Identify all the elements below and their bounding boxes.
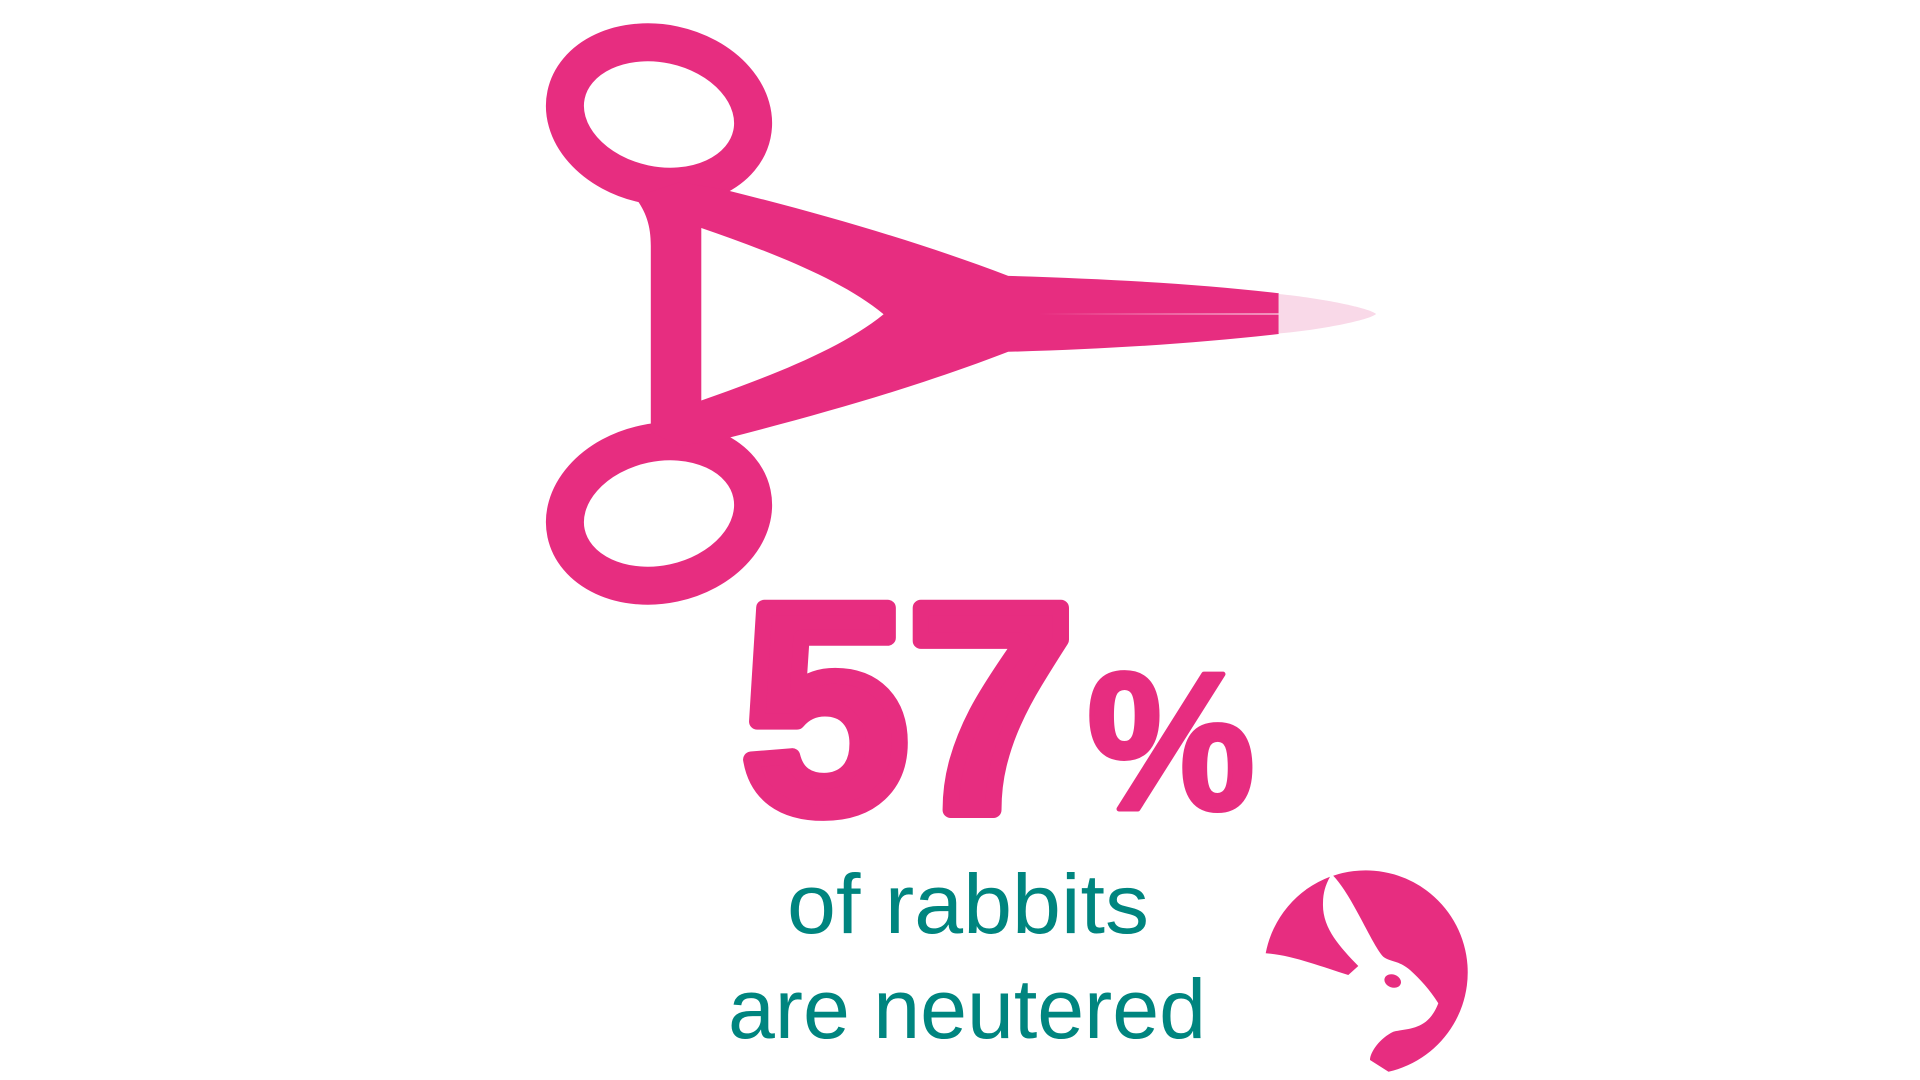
scissors bottom finger ring xyxy=(551,424,767,603)
icon: rabbit in circle xyxy=(1266,870,1468,1072)
rabbit head background segment xyxy=(1333,870,1468,1072)
statistic: 57: 57 xyxy=(742,545,1074,873)
scissors body and blades xyxy=(635,182,1279,446)
caption line: are neutered: are neutered xyxy=(728,962,1206,1056)
caption line: of rabbits: of rabbits xyxy=(787,857,1149,951)
statistic: percent sign: % xyxy=(1087,632,1255,851)
scissors tip xyxy=(1279,294,1376,334)
rabbit ear background segment xyxy=(1266,877,1358,975)
scissors top finger ring xyxy=(551,25,767,204)
rabbit eye xyxy=(1382,972,1403,990)
icon: surgical scissors xyxy=(551,25,1376,603)
scissors centre line xyxy=(1039,313,1279,315)
